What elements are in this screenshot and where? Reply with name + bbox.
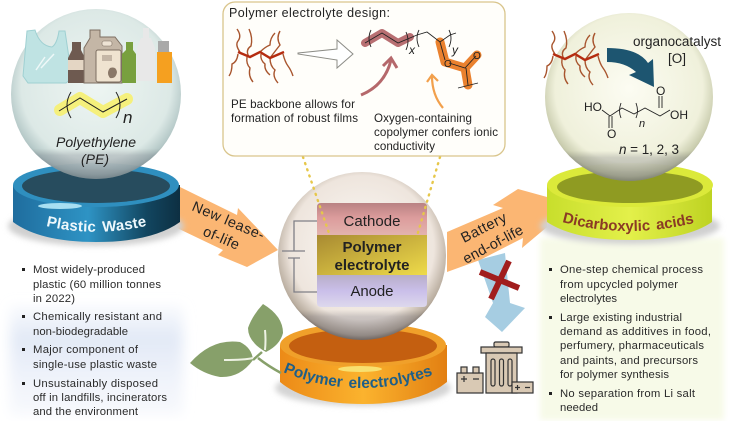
bullet 2 — [549, 312, 711, 381]
bullet 1: in 2022) — [33, 293, 75, 305]
x subscript: x — [408, 43, 416, 57]
branched polyethylene — [229, 29, 293, 83]
PE label: (PE) — [81, 151, 109, 167]
icon: trash can and batteries — [457, 342, 533, 393]
battery sphere — [278, 172, 446, 340]
copolymer caption: copolymer confers ionic — [374, 126, 498, 139]
arrow label: new lease-of-life: New lease- — [189, 199, 267, 244]
plastic waste pedestal — [6, 166, 187, 248]
circuit wires — [282, 221, 317, 292]
bullet 1 — [22, 264, 161, 305]
bullet 1: electrolytes — [560, 293, 617, 305]
panel: PE properties background — [10, 305, 183, 415]
arrow label: battery end-of-life: Battery — [459, 210, 510, 247]
oxidant label: [O] — [668, 51, 686, 66]
bullet 1: plastic (60 million tonnes — [33, 279, 161, 291]
arrow: battery end-of-life — [447, 189, 547, 272]
arrow: copolymer — [427, 75, 443, 108]
icon: white bottle — [137, 28, 155, 81]
bullet 3: No separation from Li salt — [560, 388, 696, 400]
oxygen atoms: O — [444, 59, 452, 70]
catalyst label: organocatalyst — [633, 34, 721, 49]
arrow: backbone — [361, 58, 397, 95]
anode layer — [317, 275, 427, 307]
polymer label: Polymer — [342, 239, 402, 256]
dicarboxylic acid structure — [584, 84, 688, 141]
panel: polymer electrolyte design — [223, 2, 505, 156]
icon: red cross — [480, 261, 519, 299]
bullet 2 — [22, 311, 162, 338]
polyethylene label: Polyethylene — [56, 134, 136, 150]
bullet 3: needed — [560, 402, 598, 414]
text block: dicarboxylic acid benefits — [549, 264, 711, 414]
copolymer caption — [374, 112, 498, 153]
hollow arrow — [298, 40, 353, 68]
arrow: to landfill — [478, 253, 525, 332]
bullet 4 — [22, 378, 167, 418]
label: plastic waste: Plastic Waste — [47, 216, 146, 232]
bullet 1: Most widely-produced — [33, 264, 145, 276]
bullet 2: Large existing industrial — [560, 312, 682, 324]
electrolyte layer — [317, 235, 427, 276]
icon: leaves — [190, 304, 283, 377]
icon: plastic bag — [23, 30, 72, 83]
polymer electrolytes pedestal — [274, 326, 452, 408]
polyethylene sphere — [11, 9, 181, 179]
icon: green bottle — [122, 42, 136, 83]
icon: jug — [84, 30, 122, 83]
backbone caption — [231, 98, 358, 125]
label: dicarboxylic acids: Dicarboxylic acids — [563, 212, 694, 234]
dicarboxylic acid structure: HO — [584, 100, 602, 114]
icon: brown bottle — [68, 42, 85, 83]
copolymer structure — [365, 30, 478, 88]
icon: orange bottle — [157, 41, 172, 83]
reaction arrow — [607, 48, 654, 87]
bullet 2: Chemically resistant and — [33, 311, 162, 323]
n subscript: n — [123, 108, 132, 127]
bullet 2: non-biodegradable — [33, 326, 128, 338]
bullet 3 — [22, 344, 157, 371]
copolymer caption: conductivity — [374, 140, 435, 153]
arrow label: battery end-of-life: end-of-life — [460, 222, 526, 268]
electrolyte label: electrolyte — [334, 257, 410, 274]
text block: PE properties — [22, 264, 167, 418]
arrow label: new lease-of-life: of-life — [200, 224, 242, 254]
bullet 4: Unsustainably disposed — [33, 378, 158, 390]
battery stack — [317, 203, 427, 307]
dicarboxylic pedestal — [537, 166, 722, 246]
backbone caption: formation of robust films — [231, 112, 358, 125]
dicarboxylic acid structure: O — [656, 84, 665, 98]
anode label: Anode — [350, 283, 394, 300]
branched polymer — [544, 31, 608, 85]
cathode layer — [317, 203, 427, 236]
dicarboxylic acid structure: O — [607, 127, 616, 141]
bullet 2: perfumery, pharmaceuticals — [560, 340, 704, 352]
cathode label: Cathode — [344, 213, 400, 230]
backbone caption: PE backbone allows for — [231, 98, 355, 111]
copolymer caption: Oxygen-containing — [374, 112, 472, 125]
dicarboxylic acid structure: n — [639, 118, 645, 130]
bullet 3 — [549, 388, 696, 414]
icon: carton — [96, 50, 121, 82]
dotted connectors — [303, 157, 440, 236]
dicarboxylic acid structure: OH — [670, 108, 688, 122]
bullet 2: demand as additives in food, — [560, 326, 711, 338]
bullet 4: off in landfills, incinerators — [33, 392, 167, 404]
n values: n = 1, 2, 3 — [619, 142, 679, 157]
bullet 1: One-step chemical process — [560, 264, 703, 276]
bullet 4: and the environment — [33, 406, 139, 418]
y subscript: y — [451, 43, 459, 57]
bullet 3: Major component of — [33, 344, 139, 356]
bullet 2: for polymer synthesis — [560, 369, 669, 381]
dicarboxylic sphere — [544, 13, 721, 181]
design heading: Polymer electrolyte design: — [229, 6, 390, 20]
bullet 1: from upcycled polymer — [560, 279, 678, 291]
label: polymer electrolytes: Polymer electrolytes — [284, 362, 432, 388]
bullet 1 — [549, 264, 703, 305]
sphere shade — [278, 172, 446, 340]
PE structure — [59, 92, 127, 118]
panel: dicarboxylic acids background — [540, 238, 724, 420]
arrow: new lease-of-life — [177, 187, 278, 267]
bullet 3: single-use plastic waste — [33, 359, 157, 371]
carbonyl oxygen: O — [473, 51, 481, 62]
bullet 2: and paints, and precursors — [560, 355, 698, 367]
